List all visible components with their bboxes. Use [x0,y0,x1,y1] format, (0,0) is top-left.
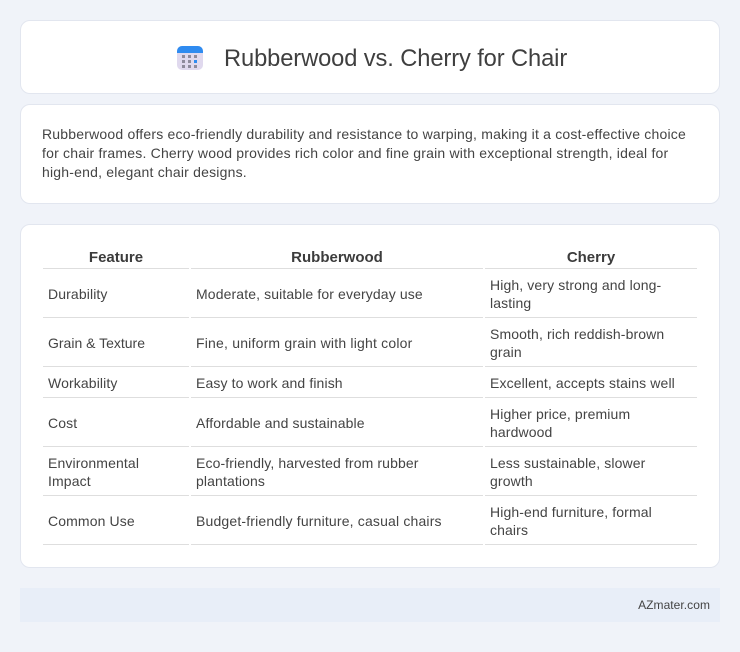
table header: Cherry [567,249,615,266]
table row: Environmental Impact: growth [490,473,533,489]
table row: Cost: Cost [48,415,77,431]
table row: Grain & Texture: grain [490,344,522,360]
icon: calendar [177,46,203,70]
table row: Workability [43,375,697,398]
summary text: high-end, elegant chair designs. [42,164,247,180]
table row: Grain & Texture: Grain & Texture [48,335,145,351]
table row: Environmental Impact: Environmental [48,455,139,471]
summary panel [20,104,720,204]
table row: Grain & Texture [43,326,697,367]
comparison table panel [20,224,720,568]
table header: Feature [89,249,143,266]
table row: Common Use: Budget-friendly furniture, casual chairs [196,513,442,529]
footer credit: AZmater.com [638,598,710,612]
table row: Workability: Excellent, accepts stains well [490,375,675,391]
title: Rubberwood vs. Cherry for Chair [224,46,567,72]
table row: Environmental Impact: plantations [196,473,265,489]
summary text: Rubberwood offers eco-friendly durability and resistance to warping, making it a cost-effective choice [42,126,686,142]
table row: Common Use [43,504,697,545]
table header [43,249,697,269]
summary text [42,126,686,180]
table row: Durability: High, very strong and long- [490,277,661,293]
table header: Rubberwood [291,249,383,266]
table row: Workability: Workability [48,375,118,391]
table row: Durability: lasting [490,295,531,311]
table row: Environmental Impact: Eco-friendly, harvested from rubber [196,455,419,471]
table row: Grain & Texture: Smooth, rich reddish-brown [490,326,664,342]
summary text: for chair frames. Cherry wood provides rich color and fine grain with exceptional strength, ideal for [42,145,668,161]
table row: Workability: Easy to work and finish [196,375,343,391]
title panel [20,20,720,94]
table row: Cost: Affordable and sustainable [196,415,365,431]
table row: Common Use: Common Use [48,513,135,529]
table row: Durability: Durability [48,286,108,302]
footer bar [20,588,720,622]
table row: Common Use: High-end furniture, formal [490,504,652,520]
table row: Common Use: chairs [490,522,528,538]
table row: Durability [43,277,697,318]
table row: Environmental Impact [43,455,697,496]
table row: Cost: Higher price, premium [490,406,630,422]
table row: Durability: Moderate, suitable for everyday use [196,286,423,302]
table row: Cost: hardwood [490,424,552,440]
table row: Environmental Impact: Less sustainable, slower [490,455,645,471]
table row: Cost [43,406,697,447]
table row: Environmental Impact: Impact [48,473,91,489]
table row: Grain & Texture: Fine, uniform grain with light color [196,335,413,351]
